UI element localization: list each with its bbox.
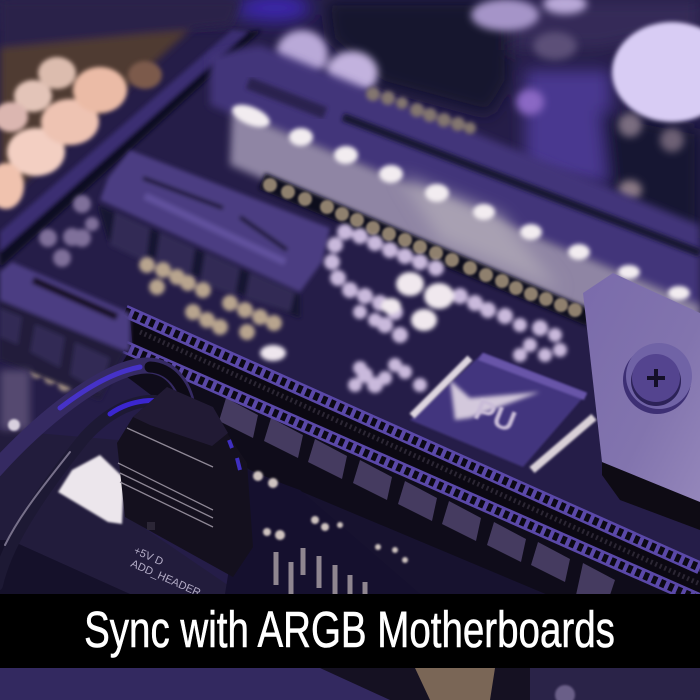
left blurred slot section <box>0 262 130 400</box>
metal band <box>230 110 700 330</box>
solder right of plug <box>253 471 408 563</box>
caption bar: Sync with ARGB Motherboards <box>84 601 615 658</box>
gold dots above slit <box>366 87 476 134</box>
gold dot strip under metal <box>262 181 590 318</box>
lights along metal band <box>229 100 690 300</box>
caption bar <box>0 594 700 668</box>
ARGB plug <box>117 387 253 577</box>
ARGB cables <box>0 366 189 585</box>
top blurred area <box>0 0 700 240</box>
capacitors <box>0 57 162 209</box>
board right of plug <box>225 470 420 594</box>
short slot <box>98 150 330 318</box>
board labels: ADD_HEADER <box>129 558 202 599</box>
chip <box>410 353 594 470</box>
diagonal slot band <box>0 30 262 268</box>
small board below slot <box>230 460 620 600</box>
blurred lilac dots left <box>39 195 99 267</box>
screw <box>623 343 692 414</box>
board labels: +5V D <box>132 545 165 568</box>
lower PCIe slot <box>118 311 700 650</box>
slot channel <box>130 318 700 600</box>
chip: PU <box>469 393 520 439</box>
top blobs <box>276 0 684 200</box>
upper slot slit <box>343 117 700 253</box>
large capacitor <box>612 22 700 122</box>
upper slot band <box>210 45 700 310</box>
lower left board <box>0 370 240 594</box>
upper ridge row <box>125 311 700 568</box>
solder cluster <box>324 224 567 393</box>
lower ridge row <box>125 347 700 600</box>
gold pins <box>276 548 365 594</box>
white header connector <box>58 455 124 524</box>
capacitor panel top left <box>0 0 240 205</box>
bottom strip under caption <box>0 668 700 700</box>
heatsink plate with screw <box>583 273 700 530</box>
gold dots centre left <box>30 257 286 391</box>
